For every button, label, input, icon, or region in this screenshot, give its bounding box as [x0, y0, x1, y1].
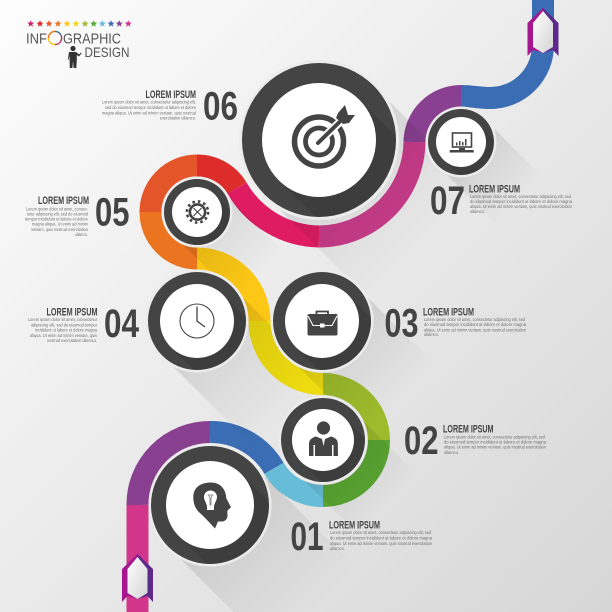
body 01: ullamco. [330, 546, 345, 551]
body 05 [25, 206, 88, 237]
number 07: 07 [430, 179, 465, 223]
body 02: ullamco. [444, 450, 459, 455]
number 05: 05 [95, 190, 130, 234]
body 05: ullamco. [75, 232, 88, 237]
number 02: 02 [404, 419, 438, 463]
logo word DESIGN: DESIGN [84, 44, 130, 60]
ribbon road [137, 0, 543, 612]
step 04 circle [148, 270, 248, 372]
heading 06: LOREM IPSUM [146, 89, 196, 101]
icon: gear [187, 201, 208, 223]
body 04: nostrud exercitation ullamco. [47, 338, 97, 343]
number 01: 01 [290, 515, 324, 559]
heading 02: LOREM IPSUM [443, 424, 494, 436]
step 07 circle [426, 106, 496, 178]
body 06 [102, 100, 196, 120]
body 07: aliqua. Ut enim ad minim veniam, quis nostrud exercitation [470, 204, 572, 209]
number 03: 03 [384, 302, 418, 346]
heading 07: LOREM IPSUM [469, 184, 520, 196]
label 06 [102, 84, 238, 128]
logo word INF: INF [26, 30, 47, 48]
body 02: aliqua. Ut enim ad minim veniam, quis nostrud exercitation [444, 444, 546, 450]
icon: monitor with chart [450, 133, 474, 152]
label 07 [430, 179, 572, 223]
body 03: do eiusmod tempor incididunt ut labore et dolore magna [424, 322, 526, 327]
number 04: 04 [104, 302, 140, 346]
body 05: magna aliqua. Ut enim ad minim [32, 222, 88, 226]
body 01 [330, 530, 432, 551]
body 03: ullamco. [424, 332, 439, 337]
body 07: Lorem ipsum dolor sit amet, consectetur adipiscing elit, sed [470, 194, 571, 199]
label 02 [404, 419, 546, 463]
heading 05: LOREM IPSUM [38, 195, 89, 207]
icon: briefcase [308, 312, 338, 336]
body 01: Lorem ipsum dolor sit amet, consectetur adipiscing elit, sed [330, 530, 431, 535]
body 04 [28, 317, 98, 343]
body 01: do eiusmod tempor incididunt ut labore et dolore magna [330, 536, 432, 540]
body 02: do eiusmod tempor incididunt ut labore et dolore magna [444, 440, 546, 444]
step 05 circle [162, 176, 232, 248]
body 06: magna aliqua. Ut enim ad minim veniam, quis nostrud [102, 110, 196, 116]
long shadows [162, 86, 544, 612]
body 04: Lorem ipsum dolor sit amet, consectetur [28, 317, 97, 322]
label 04 [28, 302, 140, 346]
icon: target with arrow [294, 105, 355, 166]
icon: clock [180, 304, 214, 338]
body 01: aliqua. Ut enim ad minim veniam, quis nostrud exercitation [330, 541, 432, 546]
body 06: sed do eiusmod tempor incididunt ut labore et dolore [105, 105, 196, 110]
logo presenter figure [68, 46, 82, 68]
body 05: tetur adipiscing elit, sed do eiusmod [27, 212, 88, 216]
body 04: aliqua. Ut enim ad minim veniam, quis [30, 333, 98, 338]
logo [26, 20, 132, 68]
body 02: Lorem ipsum dolor sit amet, consectetur adipiscing elit, sed [444, 434, 545, 440]
icon: head with light bulb [193, 482, 231, 528]
step 03 circle [270, 272, 374, 372]
bottom ribbon tag [122, 554, 153, 602]
heading 03: LOREM IPSUM [423, 306, 474, 318]
body 06: exercitation ullamco. [160, 116, 196, 120]
step 06 circle [242, 63, 399, 220]
body 06: Lorem ipsum dolor sit amet, consectetur adipiscing elit, [102, 100, 196, 104]
body 03 [424, 317, 526, 337]
body 04: incididunt ut labore et dolore magna [35, 328, 97, 332]
body 04: adipiscing elit, sed do eiusmod tempor [31, 322, 97, 328]
body 07 [470, 194, 572, 214]
body 03: Lorem ipsum dolor sit amet, consectetur adipiscing elit, sed [424, 317, 525, 322]
step 01 circle [148, 446, 272, 566]
body 05: tempor incididunt ut labore et dolore [25, 216, 88, 222]
number 06: 06 [203, 84, 238, 128]
body 07: ullamco. [470, 209, 485, 214]
top ribbon tag [528, 8, 558, 56]
heading 01: LOREM IPSUM [329, 520, 380, 532]
body 03: aliqua. Ut enim ad minim veniam, quis nostrud exercitation [424, 328, 526, 332]
label 05 [25, 190, 130, 237]
heading 04: LOREM IPSUM [46, 306, 98, 318]
body 05: veniam, quis nostrud exercitation [31, 227, 88, 232]
logo ring letter [48, 31, 62, 45]
logo word GRAPHIC: GRAPHIC [63, 30, 121, 48]
body 07: do eiusmod tempor incididunt ut labore et dolore magna [470, 199, 572, 204]
body 05: Lorem ipsum dolor sit amet, consec- [26, 206, 88, 212]
step 02 circle [281, 396, 368, 484]
label 01 [290, 515, 432, 559]
icon: businessman [309, 421, 338, 456]
body 02 [444, 434, 546, 455]
label 03 [384, 302, 526, 346]
logo stars [27, 20, 132, 27]
